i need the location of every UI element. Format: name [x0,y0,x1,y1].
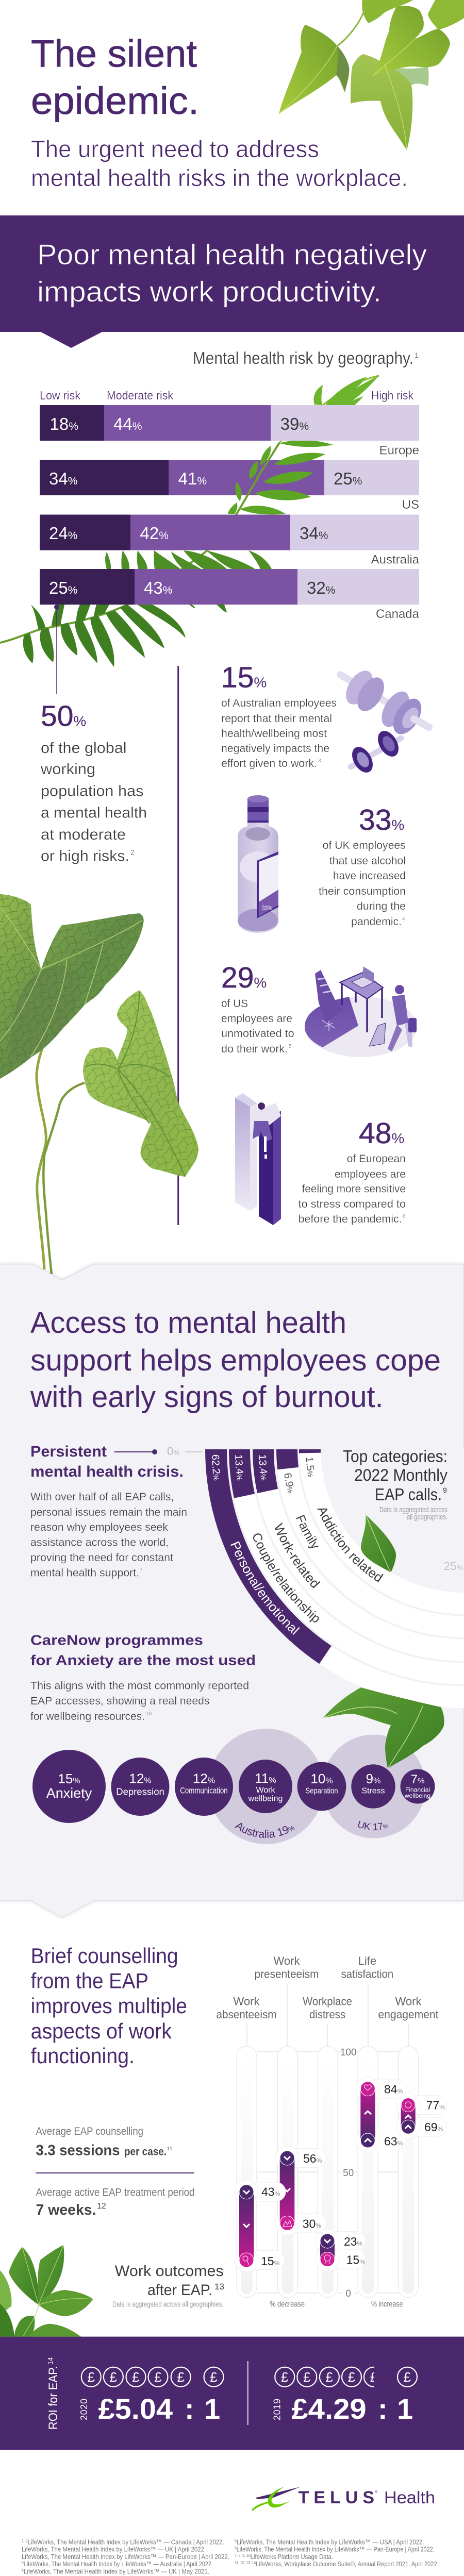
stat: average sessions [36,2126,173,2159]
ROI 2019: 2019 [272,2399,283,2420]
geography labels: Canada [376,607,420,621]
stat: 48 percent [299,1117,406,1225]
stat: 48 percent: before the pandemic. [299,1213,402,1225]
legend: risk levels: High risk [371,389,413,402]
footnotes: 4 [22,2568,24,2572]
chart column labels: absenteeism [217,2008,276,2021]
subheading: persistent crisis: Persistent [30,1443,107,1460]
column: life satisfaction: 84% [384,2083,403,2096]
coins: 2020: £ [154,2369,162,2385]
radial chart: EAP call categories: Personal/emotional [230,1541,300,1635]
footnotes: 7, 8, 9, 10 [235,2553,251,2558]
chart heading: risk by geography: 1 [415,351,419,359]
stat: 48 percent: employees are [335,1168,406,1180]
bar: US: 25% [334,469,362,488]
ROI 2020: 1 [204,2393,220,2425]
subheading: CareNow: for Anxiety are the most used [30,1652,256,1668]
bar: Australia [40,514,419,550]
column: workplace distress: 15% [346,2253,365,2267]
chart heading: risk by geography: Mental health risk by geography. [193,348,413,367]
body text: CareNow: EAP accesses, showing a real needs [30,1695,209,1707]
bar: Canada: 25% [49,578,77,597]
icon: bottle [238,795,278,933]
bubble: Separation [297,1762,346,1811]
ROI 2020: £5.04 [98,2393,173,2425]
bubble: Anxiety: 15% [58,1771,80,1786]
stat: 15 percent: 15% [221,661,267,694]
stat: 15 percent: health/wellbeing most [221,728,327,740]
bubble: Stress: Stress [361,1786,385,1795]
body text: crisis: With over half of all EAP calls, [30,1491,174,1503]
footnotes: LifeWorks, The Mental Health Index by LifeWorks™ — Canada | April 2022. [28,2538,224,2546]
stat: 15 percent: effort given to work. [221,758,317,770]
bubble: Financial wellbeing: 7% [411,1772,424,1786]
bubble: Communication: Communication [180,1786,228,1795]
chart column labels: Work [395,1995,422,2008]
column divider [177,666,179,1225]
axis captions: % decrease [270,2300,305,2309]
column: work presenteeism [275,2146,326,2235]
subtitle: The urgent need to address [31,136,319,162]
stat: 33 percent: pandemic. [351,916,402,928]
radial chart: EAP call categories: Family [296,1515,319,1548]
stat: average sessions: Average EAP counselling [36,2126,143,2137]
coins: 2019: £ [370,2369,378,2385]
ROI 2020: 2020 [79,2399,89,2420]
stat: 48 percent: to stress compared to [299,1198,406,1210]
illustration: leaf over bubbles [323,1687,444,1768]
stat: 33 percent: during the [357,900,406,912]
subheading: CareNow: CareNow programmes [30,1632,203,1648]
footnotes: 3 [22,2561,24,2565]
footnotes: LifeWorks Platform Usage Data. [251,2553,333,2561]
stat: 48 percent: feeling more sensitive [302,1183,406,1195]
chart title: top categories: all geographies. [407,1513,448,1521]
bubble: Separation: 10% [310,1771,333,1786]
ROI 2020: : [185,2393,194,2425]
illustration: bottom-left leaves [0,2245,93,2337]
stat: 33 percent: 33% [359,804,404,837]
legend: risk levels: Moderate risk [107,389,173,402]
bubble backgrounds: Australia and UK: Australia 19% [235,1822,295,1838]
illustration: fern [0,376,379,667]
heading: brief counselling [31,1944,187,2068]
icon: person on ledge [235,1093,281,1225]
stat: 29 percent: do their work. [221,1043,288,1055]
coins: 2019: £ [348,2369,356,2385]
body text: crisis: proving the need for constant [30,1552,173,1564]
chart column labels: Workplace [303,1995,352,2008]
chart caption: work outcomes [112,2263,224,2309]
column: workplace distress: 23% [344,2235,363,2248]
ROI label: ROI for EAP. [46,2366,60,2430]
title: The silent [31,32,197,75]
bubble: Financial wellbeing [400,1769,435,1804]
body text: crisis: mental health support. [30,1567,139,1579]
stat: 50 percent: 50% [41,700,86,733]
heading: access: support helps employees cope [30,1344,441,1377]
coins: 2020: £ [177,2369,185,2385]
coins: 2020: £ [132,2369,140,2385]
stat: average sessions: 11 [167,2146,173,2152]
subheading: persistent crisis [30,1443,184,1480]
column: work absenteeism: 15% [261,2254,280,2268]
chart column labels: Work [274,1954,300,1967]
chart caption: work outcomes: Work outcomes [115,2263,224,2280]
column: life satisfaction [356,2077,406,2152]
heading: access [30,1306,441,1414]
coins: 2020: £ [88,2369,95,2385]
icon: bottle: 33% [262,904,272,912]
footnotes: LifeWorks, The Mental Health Index by LifeWorks™ — USA | April 2022. [237,2538,424,2546]
work outcomes chart: 100 [340,2047,357,2058]
coins: 2019: £ [326,2369,334,2385]
stat: 29 percent [221,961,294,1055]
footnotes: 5 [235,2539,237,2544]
footnotes: 6 [235,2546,237,2550]
bubble: Anxiety [32,1750,106,1823]
column: work engagement [396,2093,447,2139]
icon: dumbbells [340,666,429,776]
coins: 2020 [81,2367,224,2387]
bubble: Stress [351,1764,395,1809]
column: workplace distress [316,2229,366,2271]
stat: 33 percent: their consumption [319,885,406,897]
coins: 2019 [275,2367,417,2387]
stat: 50 percent: a mental health [41,805,147,822]
stat: 15 percent: report that their mental [221,713,332,725]
body text: crisis: assistance across the world, [30,1536,169,1548]
ROI 2019: : [378,2393,388,2425]
stat: 15 percent: 3 [318,758,321,764]
coins: 2020: £ [110,2369,118,2385]
bubble: Stress: 9% [366,1771,380,1786]
radial chart: EAP call categories: Addiction related [317,1508,384,1582]
body text: crisis: reason why employees seek [30,1521,168,1533]
pointer to zero axis: 0% [167,1445,180,1458]
work outcomes chart [217,1954,447,2309]
stat: 29 percent: 29% [221,961,267,994]
stat: 33 percent: have increased [333,870,406,882]
ROI 2019 [272,2393,413,2425]
bar: Canada: 43% [144,578,172,597]
heading: access: with early signs of burnout. [30,1380,383,1414]
stat: 50 percent: at moderate [41,826,126,843]
chart column labels: satisfaction [341,1968,393,1980]
banner: poor mental health: impacts work productivity. [37,275,382,308]
ROI 2019: £4.29 [291,2393,367,2425]
bar: US [40,460,419,495]
bubble: Separation: Separation [305,1786,338,1795]
column: work absenteeism [235,2180,286,2272]
stat: 48 percent: 48% [359,1117,404,1150]
footnotes: LifeWorks, The Mental Health Index by LifeWorks™ — Australia | April 2022. [24,2560,213,2568]
bubble: Financial wellbeing: wellbeing [404,1792,430,1799]
body text: crisis: personal issues remain the main [30,1507,187,1518]
axis captions [270,2300,403,2309]
bar: US: 41% [178,469,207,488]
column: work engagement: 69% [424,2120,443,2134]
coins: 2020: £ [210,2369,218,2385]
chart column labels: engagement [378,2008,438,2021]
column: work presenteeism: 56% [303,2152,322,2165]
subheading: CareNow [30,1632,256,1668]
radial chart: EAP call categories: 25% [444,1560,463,1573]
footnotes: LifeWorks, Workplace Outcome Suite©, Annual Report 2021, April 2022. [256,2560,439,2568]
body text: crisis: 7 [140,1567,143,1573]
ROI 2020 [79,2393,220,2425]
chart column labels: Work [234,1995,260,2008]
stat: 15 percent: of Australian employees [221,697,337,709]
heading: brief counselling: improves multiple [31,1994,187,2018]
footnotes: LifeWorks, The Mental Health Index by LifeWorks™ — UK | April 2022. [22,2545,206,2553]
heading: brief counselling: functioning. [31,2044,135,2068]
bubble backgrounds: Australia and UK [215,1729,423,1844]
coins: 2019: £ [303,2369,311,2385]
logo: TELUS Health: Health [384,2488,435,2507]
chart title: top categories: EAP calls. [375,1485,442,1504]
logo: TELUS Health [252,2487,435,2511]
illustration: plant with veined leaves [0,894,198,1274]
bar: Europe: 44% [113,414,142,433]
body text: CareNow: for wellbeing resources. [30,1711,145,1722]
bar: Europe: 18% [49,414,78,433]
column: work engagement: 77% [426,2099,445,2112]
bar: Australia: 42% [140,524,169,543]
coins: 2019: £ [281,2369,289,2385]
subtitle [31,136,408,191]
illustration: top ivy leaves [279,0,464,150]
body text: crisis [30,1491,187,1579]
column: work absenteeism: 43% [261,2185,280,2199]
body text: CareNow [30,1680,249,1722]
coins: 2019: £ [404,2369,411,2385]
heading: brief counselling: aspects of work [31,2019,172,2043]
chart column labels: presenteeism [255,1968,319,1980]
stat: treatment period: 7 weeks. [36,2202,96,2218]
chart title: top categories: Top categories: [343,1447,448,1466]
stat: 48 percent: 6 [403,1214,406,1219]
chart column labels: Life [358,1954,376,1967]
bubble backgrounds: Australia and UK: UK 17% [358,1820,389,1831]
chart column labels: distress [309,2008,345,2021]
radial chart: EAP call categories: Work-related [274,1523,321,1588]
bubble: Depression: Depression [116,1786,164,1797]
stat: average sessions: per case. [124,2146,167,2158]
body text: CareNow: 10 [146,1711,152,1717]
panel: access to support [0,1263,464,1918]
pointer to zero axis [114,1445,203,1458]
footnotes: 11, 12, 13, 14 [235,2561,256,2565]
bubble: Depression [111,1758,169,1816]
radial chart: EAP call categories: 13.4% [259,1455,267,1480]
work outcomes chart: 50 [343,2168,354,2179]
stat: 29 percent: of US [221,998,248,1010]
chart caption: work outcomes: after EAP. [147,2282,212,2299]
bar: Europe [40,405,419,441]
banner: ROI [0,2337,464,2450]
bubble: Work wellbeing [239,1760,292,1813]
bubble: Communication: 12% [193,1771,215,1786]
stat: treatment period: Average active EAP treatment period [36,2187,195,2199]
geography labels: US [402,498,419,512]
radial chart: EAP call categories: 62.2 % [212,1454,220,1480]
footnotes [22,2538,439,2575]
stat: 33 percent [319,804,406,928]
pointer line to 50% stat [54,605,59,694]
bubble: Depression: 12% [129,1771,152,1786]
stat: 33 percent: of UK employees [323,840,406,851]
heading: brief counselling: from the EAP [31,1969,148,1993]
geography labels [371,443,420,621]
bar: Australia: 34% [300,524,328,543]
stat: 15 percent: negatively impacts the [221,743,329,755]
stat: 33 percent: 4 [402,916,405,922]
stat: 29 percent: unmotivated to [221,1028,294,1040]
ROI label: 14 [46,2357,54,2365]
banner: poor mental health: Poor mental health negatively [37,238,427,271]
chart caption: work outcomes: 13 [214,2282,224,2291]
illustration: small leaf [361,1514,396,1573]
bubble: Financial wellbeing: Financial [405,1786,430,1794]
bubble: Work wellbeing: wellbeing [248,1795,283,1803]
icon: desk and person leaving [305,966,417,1057]
radial chart: EAP call categories: 6.9% [285,1473,293,1494]
footnotes: 1, 2 [22,2539,28,2544]
column: work presenteeism: 30% [303,2217,321,2230]
logo: TELUS Health: TELUS [299,2488,374,2507]
bar: Canada: 32% [307,578,335,597]
bubble: Work wellbeing: Work [256,1786,276,1795]
stat: 50 percent: of the global [41,740,126,757]
radial chart: EAP call categories: Couple/relationship [253,1533,319,1622]
bubble: Anxiety: Anxiety [46,1785,92,1801]
bar: US: 34% [49,469,77,488]
chart title: top categories: 9 [443,1486,447,1494]
axis captions: % increase [371,2300,403,2309]
stat: 50 percent: population has [41,783,143,800]
stat: treatment period [36,2187,195,2218]
radial chart: EAP call categories [205,1449,464,1708]
heading: access: Access to mental health [30,1306,346,1340]
chart caption: work outcomes: Data is aggregated across all geographies. [112,2300,223,2309]
footnotes: LifeWorks, The Mental Health Index by LifeWorks™ — Pan-Europe | April 2022. [22,2553,229,2561]
body text: CareNow: This aligns with the most commonly reported [30,1680,249,1692]
logo: TELUS Health: ® [375,2490,378,2494]
stat: treatment period: 12 [97,2202,106,2211]
title [31,32,199,122]
stat: 50 percent: 2 [130,848,135,856]
stat: 50 percent: or high risks. [41,847,129,865]
column: life satisfaction: 63% [384,2135,403,2148]
chart title: top categories: 2022 Monthly [354,1466,448,1484]
banner: poor mental health [0,215,464,348]
stat: 48 percent: of European [347,1153,406,1165]
title: epidemic. [31,79,199,122]
chart column labels [217,1954,438,2021]
subheading: persistent crisis: mental health crisis. [30,1463,184,1480]
stat: 29 percent: employees are [221,1013,292,1025]
work outcomes chart: 0 [345,2288,351,2299]
bubble: Communication [175,1758,233,1816]
stat: 29 percent: 5 [289,1044,292,1049]
heading: brief counselling: Brief counselling [31,1944,178,1968]
bar: Canada [40,569,419,605]
footnotes: LifeWorks, The Mental Health Index by LifeWorks™ — UK | May 2021. [24,2567,209,2575]
stat: 15 percent [221,661,337,770]
subtitle: mental health risks in the workplace. [31,164,408,191]
legend: risk levels [40,389,413,402]
geography labels: Australia [371,553,420,567]
geography labels: Europe [379,443,419,458]
stat: 50 percent [40,700,147,865]
legend: risk levels: Low risk [40,389,80,402]
stat: 50 percent: working [40,761,95,778]
ROI 2019: 1 [397,2393,413,2425]
chart title: top categories [343,1447,448,1521]
bubble: Work wellbeing: 11% [255,1770,276,1786]
stat: 33 percent: that use alcohol [329,855,406,867]
divider [36,2172,194,2173]
radial chart: EAP call categories: 13.4% [235,1455,243,1480]
bar: Australia: 24% [49,524,77,543]
radial chart: EAP call categories: 1.5% [306,1458,314,1477]
bar: Europe: 39% [280,414,309,433]
stat: average sessions: 3.3 sessions [36,2143,120,2159]
